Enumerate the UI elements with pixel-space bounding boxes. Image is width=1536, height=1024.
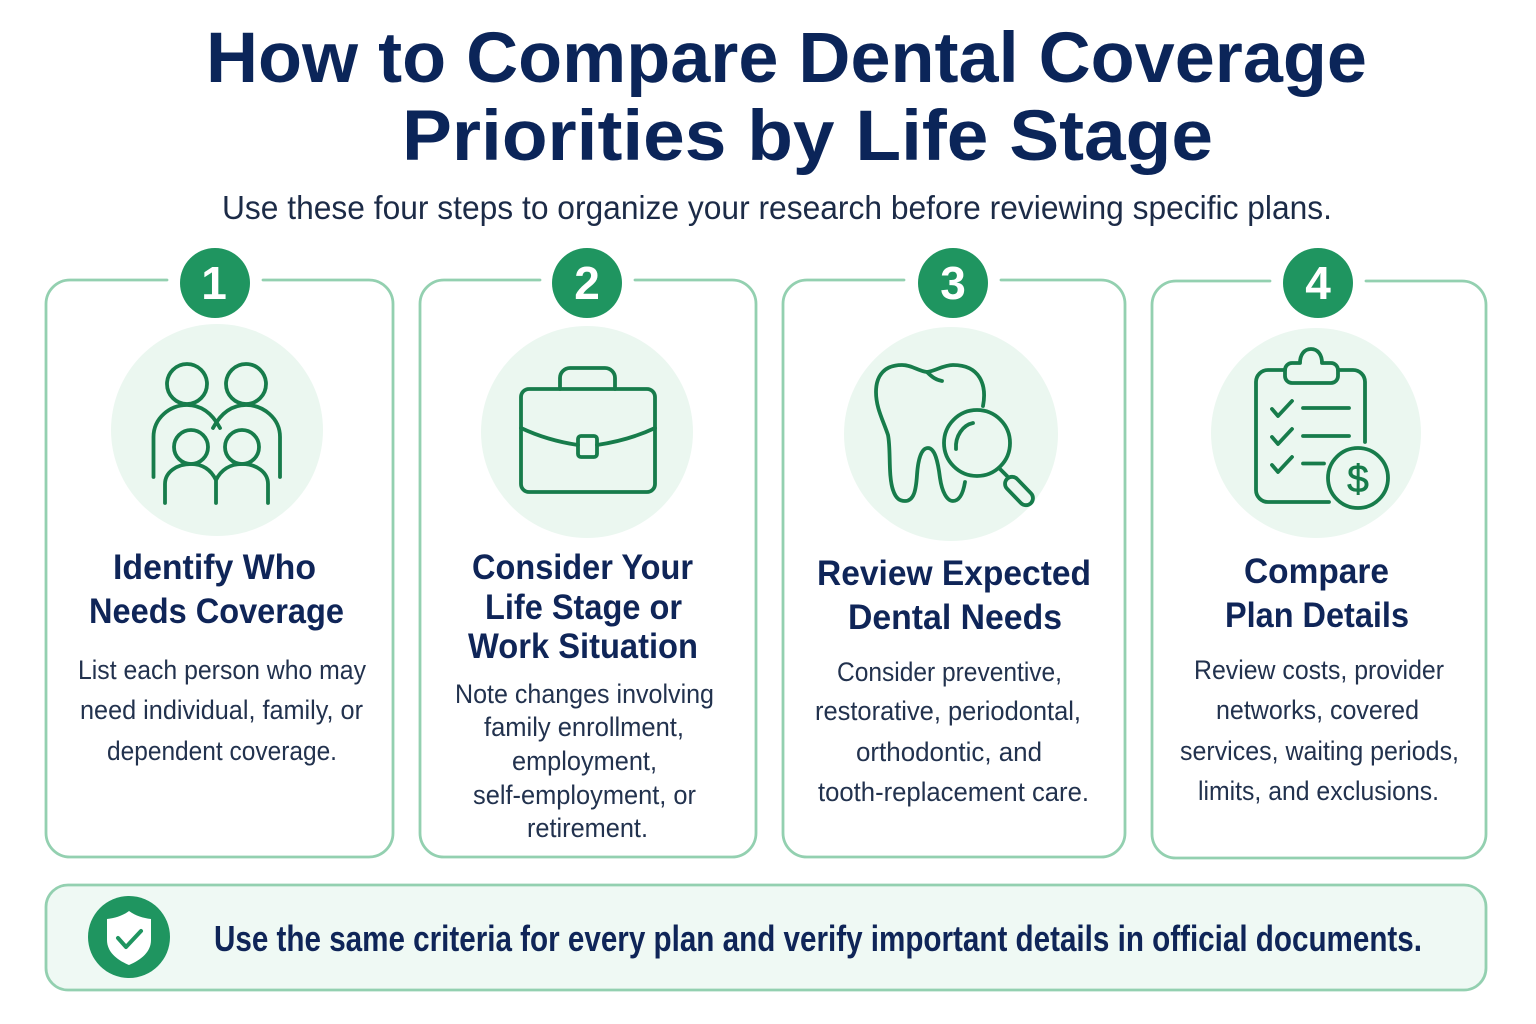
text: step 1 description: need individual, family, or bbox=[80, 695, 363, 725]
heading: identify who needs coverage: Identify Who bbox=[113, 548, 316, 587]
title: Priorities by Life Stage bbox=[402, 97, 1213, 176]
text: step 4 description bbox=[1180, 655, 1459, 806]
heading: identify who needs coverage bbox=[89, 548, 344, 631]
heading: review expected dental needs bbox=[817, 554, 1091, 637]
heading: consider your life stage or work situation: Consider Your bbox=[472, 548, 693, 587]
icon: clipboard with dollar: $ bbox=[1347, 458, 1369, 501]
step number 4 bbox=[1283, 248, 1353, 318]
step number 4: 4 bbox=[1305, 257, 1331, 309]
text: step 3 description: restorative, periodontal, bbox=[815, 696, 1081, 726]
heading: review expected dental needs: Dental Needs bbox=[848, 598, 1062, 637]
text: step 2 description bbox=[455, 679, 714, 843]
panel: step 4 bbox=[1152, 248, 1486, 858]
text: step 3 description bbox=[815, 657, 1089, 807]
heading: compare plan details: Plan Details bbox=[1225, 596, 1409, 635]
heading: compare plan details: Compare bbox=[1244, 552, 1389, 591]
text: step 3 description: tooth-replacement care. bbox=[818, 777, 1089, 807]
text: step 3 description: Consider preventive, bbox=[837, 657, 1062, 687]
icon: clipboard with dollar bbox=[1211, 328, 1421, 538]
heading: review expected dental needs: Review Expected bbox=[817, 554, 1091, 593]
callout: banner bbox=[46, 885, 1486, 990]
step number 2: 2 bbox=[574, 257, 600, 309]
step number 1 bbox=[180, 248, 250, 318]
heading: consider your life stage or work situation: Work Situation bbox=[468, 627, 698, 666]
heading: compare plan details bbox=[1225, 552, 1409, 635]
text: step 4 description: networks, covered bbox=[1216, 695, 1419, 725]
heading: consider your life stage or work situation bbox=[468, 548, 698, 666]
icon: briefcase bbox=[481, 326, 693, 538]
text: step 4 description: services, waiting periods, bbox=[1180, 736, 1459, 766]
text: step 1 description bbox=[78, 655, 366, 766]
subtitle: Use these four steps to organize your research before reviewing specific plans. bbox=[222, 189, 1332, 226]
text: step 1 description: List each person who may bbox=[78, 655, 366, 685]
step number 2 bbox=[552, 248, 622, 318]
icon: family bbox=[111, 324, 323, 536]
step number 1: 1 bbox=[201, 257, 227, 309]
text: step 2 description: family enrollment, bbox=[484, 712, 684, 742]
panel: step 3 bbox=[783, 248, 1125, 857]
step number 3 bbox=[918, 248, 988, 318]
text: step 2 description: self-employment, or bbox=[473, 780, 696, 810]
icon: tooth with magnifier bbox=[844, 327, 1058, 541]
heading: identify who needs coverage: Needs Coverage bbox=[89, 592, 344, 631]
title: How to Compare Dental Coverage bbox=[206, 19, 1367, 98]
heading: consider your life stage or work situation: Life Stage or bbox=[485, 588, 682, 627]
text: step 4 description: Review costs, provider bbox=[1194, 655, 1444, 685]
panel: step 1 bbox=[46, 248, 393, 857]
text: step 2 description: retirement. bbox=[527, 813, 648, 843]
step number 3: 3 bbox=[940, 257, 966, 309]
icon: shield check bbox=[88, 896, 170, 978]
title bbox=[206, 19, 1367, 176]
text: step 2 description: Note changes involving bbox=[455, 679, 714, 709]
text: step 3 description: orthodontic, and bbox=[856, 737, 1042, 767]
text: step 2 description: employment, bbox=[512, 746, 657, 776]
panel: step 2 bbox=[420, 248, 756, 857]
text: step 4 description: limits, and exclusions. bbox=[1198, 776, 1439, 806]
text: step 1 description: dependent coverage. bbox=[107, 736, 337, 766]
